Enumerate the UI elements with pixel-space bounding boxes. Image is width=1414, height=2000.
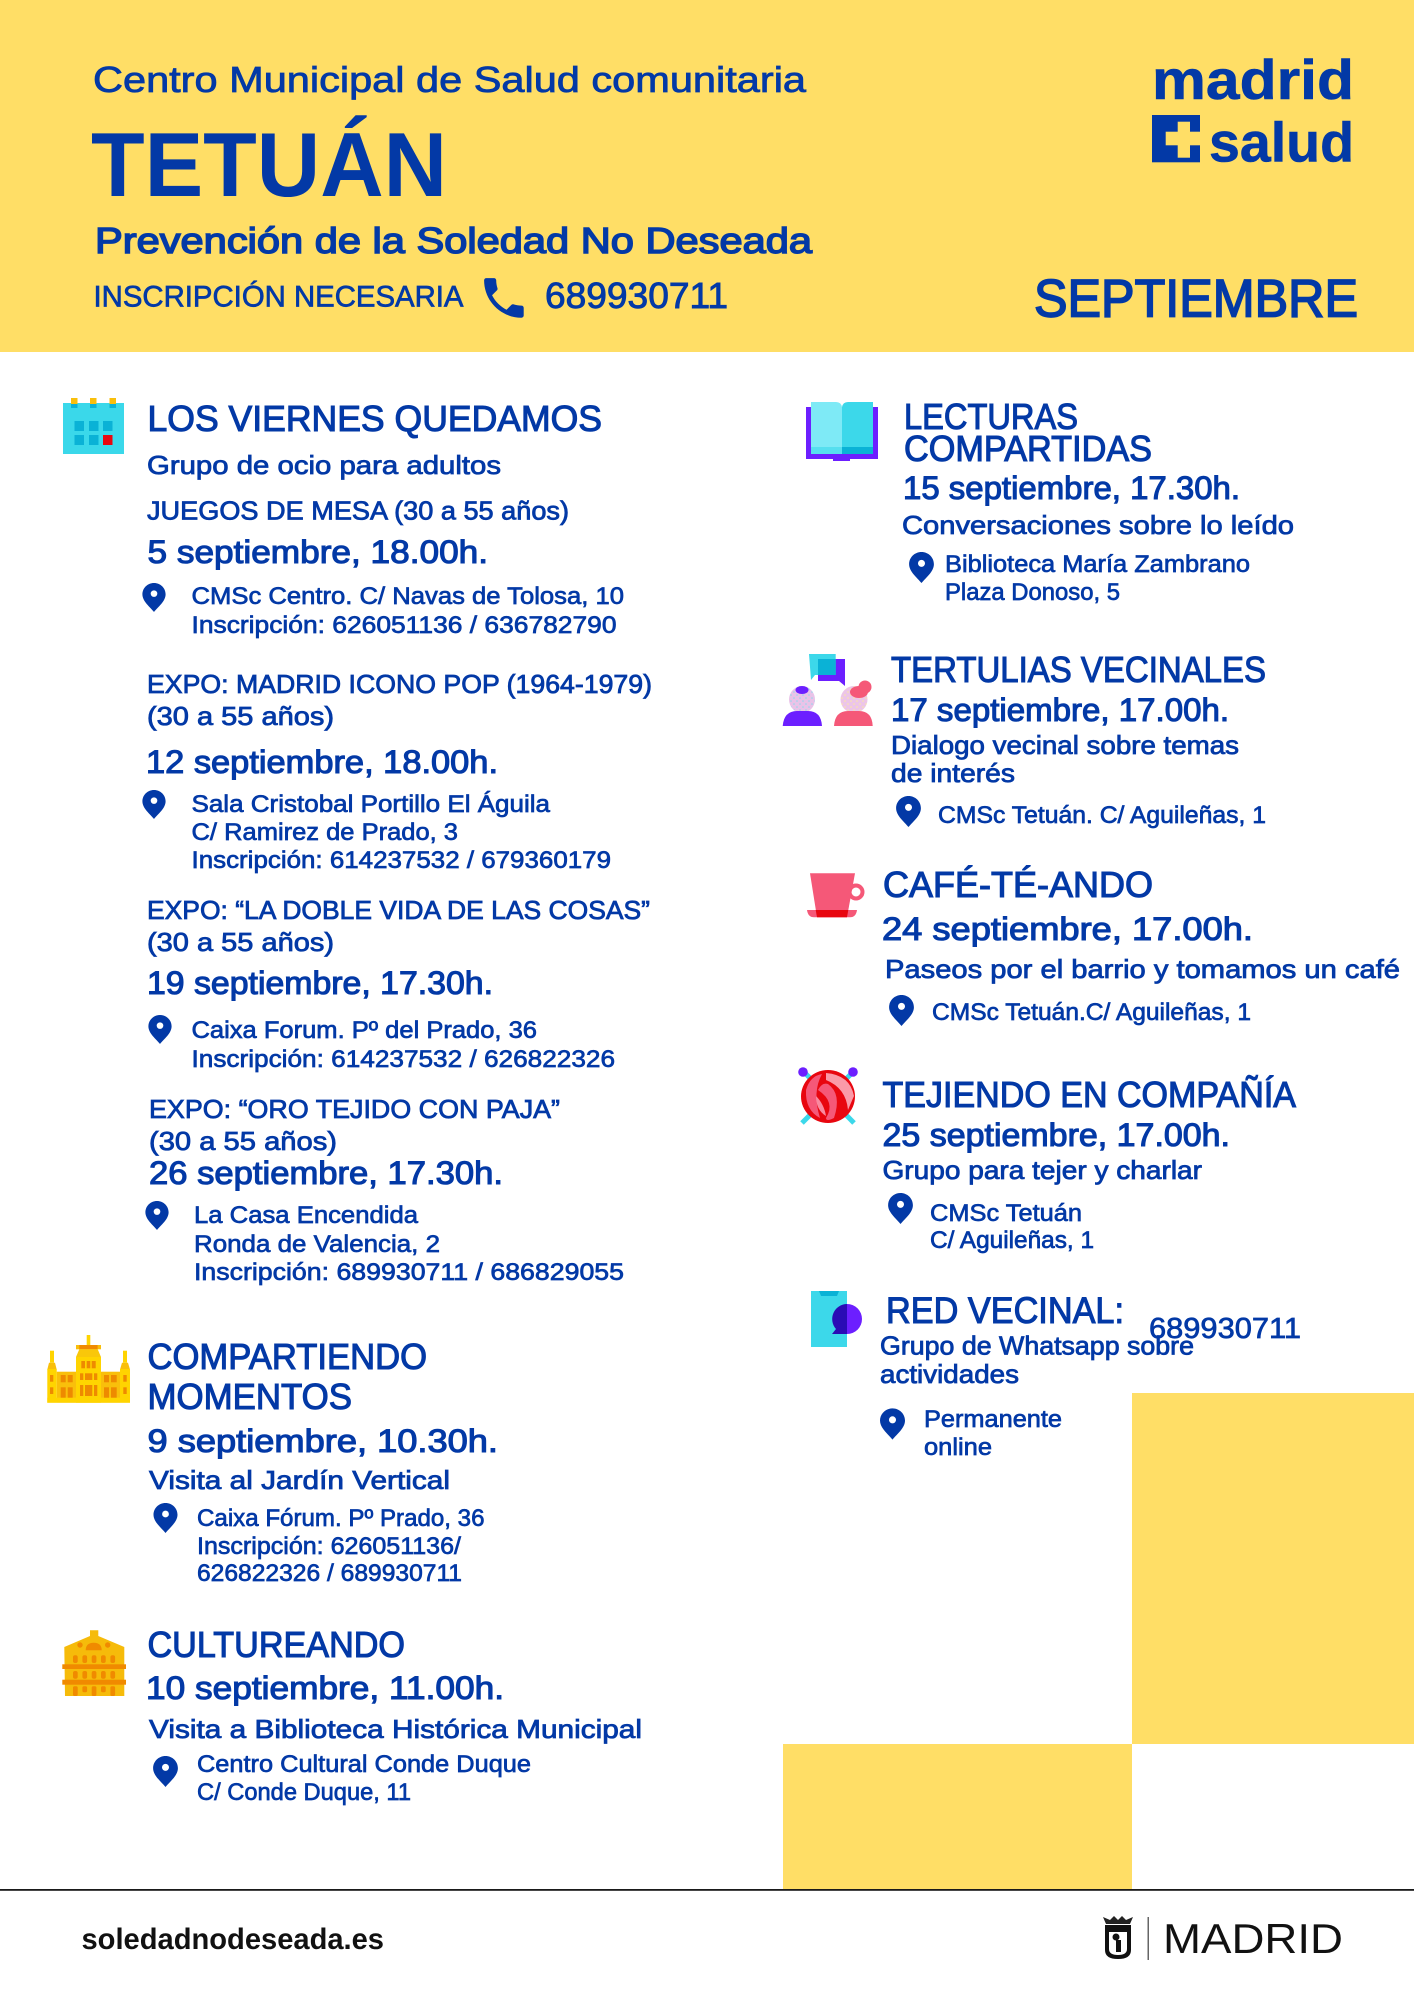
description: Paseos por el barrio y tomamos un café <box>885 954 1400 984</box>
event: juegos de mesa: Inscripción: 626051136 / 636782790 <box>192 612 616 639</box>
heading: CAFÉ-TÉ-ANDO <box>883 864 1153 905</box>
location: 626822326 / 689930711 <box>197 1560 462 1587</box>
heading: COMPARTIENDO <box>148 1336 427 1377</box>
event: juegos de mesa: 5 septiembre, 18.00h. <box>148 534 488 570</box>
location <box>880 1406 1062 1461</box>
location: C/ Conde Duque, 11 <box>197 1779 411 1806</box>
location <box>154 1503 484 1587</box>
footer <box>0 1889 1414 1962</box>
event: madrid icono pop: Inscripción: 614237532 / 679360179 <box>192 847 611 874</box>
location: CMSc Tetuán. C/ Aguileñas, 1 <box>938 802 1266 829</box>
panel: tejiendo en compañía <box>798 1067 1296 1254</box>
event: oro tejido con paja: EXPO: “ORO TEJIDO CON PAJA” <box>149 1094 560 1124</box>
heading: TEJIENDO EN COMPAÑÍA <box>882 1074 1296 1115</box>
description line 2: actividades <box>880 1359 1019 1389</box>
event: madrid icono pop: EXPO: MADRID ICONO POP (1964-1979) <box>147 669 652 699</box>
heading line 2: MOMENTOS <box>148 1376 352 1417</box>
header panel <box>0 0 1414 352</box>
heading: CULTUREANDO <box>148 1624 405 1665</box>
location: Biblioteca María Zambrano <box>945 551 1250 578</box>
location: Centro Cultural Conde Duque <box>197 1751 531 1778</box>
phone number: 689930711 <box>545 275 728 316</box>
event: la doble vida de las cosas: 19 septiembre, 17.30h. <box>147 965 493 1001</box>
description: Grupo para tejer y charlar <box>882 1155 1202 1185</box>
heading: TERTULIAS VECINALES <box>891 649 1266 690</box>
logo: madrid salud: madrid <box>1152 48 1354 111</box>
icon: calendar <box>63 398 124 454</box>
heading: LECTURAS <box>904 396 1078 437</box>
heading: RED VECINAL: <box>886 1290 1124 1331</box>
logo: madrid salud <box>1152 48 1354 174</box>
icon: building <box>62 1630 126 1696</box>
location: Permanente <box>924 1406 1062 1433</box>
location: C/ Aguileñas, 1 <box>930 1227 1094 1254</box>
event: juegos de mesa: JUEGOS DE MESA (30 a 55 años) <box>147 496 569 526</box>
panel: tertulias vecinales <box>783 649 1266 829</box>
location: online <box>924 1434 992 1461</box>
event: la doble vida de las cosas: (30 a 55 años) <box>147 927 334 957</box>
icon: book <box>806 402 878 461</box>
event: oro tejido con paja: (30 a 55 años) <box>149 1126 337 1156</box>
panel: compartiendo momentos <box>47 1335 498 1587</box>
logo: madrid salud: salud <box>1209 111 1354 174</box>
logo: ayuntamiento de madrid <box>1103 1915 1343 1962</box>
date: 10 septiembre, 11.00h. <box>146 1670 504 1706</box>
date: 24 septiembre, 17.00h. <box>882 911 1253 947</box>
subtitle: centro municipal: Centro Municipal de Salud comunitaria <box>93 59 807 100</box>
description: Visita al Jardín Vertical <box>149 1465 450 1495</box>
icon: yarn ball <box>798 1067 858 1123</box>
event: juegos de mesa <box>142 496 624 639</box>
icon: phone with chat bubble <box>811 1291 862 1347</box>
event: la doble vida de las cosas: Caixa Forum. Pº del Prado, 36 <box>192 1017 537 1044</box>
panel: los viernes quedamos <box>63 398 652 1286</box>
subtitle: prevención: Prevención de la Soledad No Deseada <box>95 220 813 261</box>
event: madrid icono pop <box>142 669 652 874</box>
website: soledadnodeseada.es <box>82 1923 384 1956</box>
icon: palace <box>47 1335 130 1403</box>
inscription label: INSCRIPCIÓN NECESARIA <box>94 281 464 314</box>
event: madrid icono pop: C/ Ramirez de Prado, 3 <box>192 819 458 846</box>
location <box>153 1751 531 1806</box>
date: 15 septiembre, 17.30h. <box>903 470 1240 506</box>
panel: café-té-ando <box>807 864 1400 1026</box>
icon: cup <box>807 873 862 917</box>
heading line 2: COMPARTIDAS <box>904 428 1152 469</box>
event: juegos de mesa: CMSc Centro. C/ Navas de Tolosa, 10 <box>192 583 624 610</box>
event: oro tejido con paja: 26 septiembre, 17.30h. <box>149 1155 503 1191</box>
location: Plaza Donoso, 5 <box>945 579 1120 606</box>
title: Tetuán: TETUÁN <box>91 115 447 216</box>
panel: lecturas compartidas <box>806 396 1294 606</box>
panel: cultureando <box>62 1624 642 1806</box>
description: Grupo de Whatsapp sobre <box>880 1330 1194 1360</box>
description: Grupo de ocio para adultos <box>147 450 501 480</box>
event: madrid icono pop: Sala Cristobal Portillo El Águila <box>192 791 551 818</box>
date: 25 septiembre, 17.00h. <box>882 1117 1230 1153</box>
heading: LOS VIERNES QUEDAMOS <box>148 398 602 439</box>
description: Visita a Biblioteca Histórica Municipal <box>149 1714 642 1744</box>
event: madrid icono pop: (30 a 55 años) <box>147 701 334 731</box>
event: la doble vida de las cosas <box>147 895 650 1073</box>
event: oro tejido con paja: Inscripción: 689930711 / 686829055 <box>194 1259 624 1286</box>
event: oro tejido con paja <box>145 1094 624 1286</box>
location: CMSc Tetuán.C/ Aguileñas, 1 <box>932 999 1251 1026</box>
month: SEPTIEMBRE <box>1034 270 1358 329</box>
panel: red vecinal <box>811 1290 1301 1461</box>
logo: ayuntamiento de madrid: MADRID <box>1163 1915 1343 1962</box>
description line 2: de interés <box>891 758 1015 788</box>
event: oro tejido con paja: La Casa Encendida <box>194 1202 419 1229</box>
location <box>888 1193 1094 1254</box>
decorative yellow blocks <box>783 1393 1414 1889</box>
event: madrid icono pop: 12 septiembre, 18.00h. <box>146 744 498 780</box>
description: Dialogo vecinal sobre temas <box>891 730 1239 760</box>
event: oro tejido con paja: Ronda de Valencia, 2 <box>194 1231 440 1258</box>
date: 9 septiembre, 10.30h. <box>148 1423 498 1459</box>
location <box>909 551 1250 606</box>
location: Caixa Fórum. Pº Prado, 36 <box>197 1505 484 1532</box>
event: la doble vida de las cosas: Inscripción: 614237532 / 626822326 <box>192 1046 615 1073</box>
icon: people talking <box>783 654 873 726</box>
location: CMSc Tetuán <box>930 1200 1082 1227</box>
location: Inscripción: 626051136/ <box>197 1533 461 1560</box>
event: la doble vida de las cosas: EXPO: “LA DOBLE VIDA DE LAS COSAS” <box>147 895 650 925</box>
icon: phone <box>484 278 524 318</box>
description: Conversaciones sobre lo leído <box>902 510 1294 540</box>
whatsapp number: 689930711 <box>1149 1313 1301 1345</box>
date: 17 septiembre, 17.00h. <box>891 692 1229 728</box>
